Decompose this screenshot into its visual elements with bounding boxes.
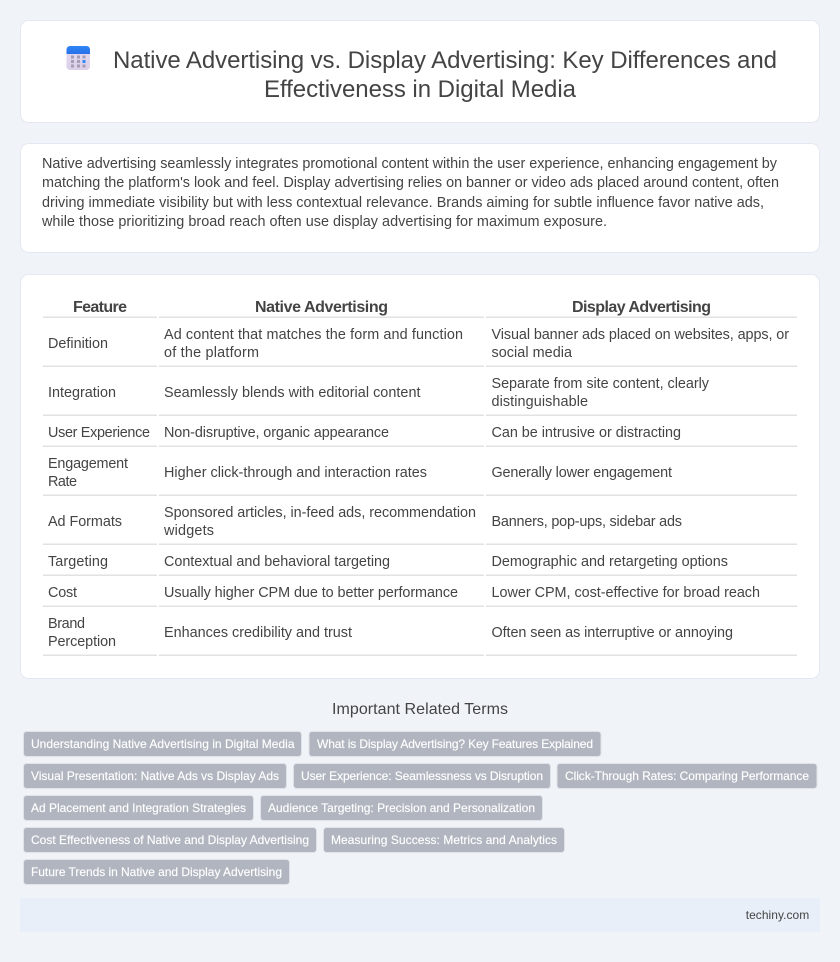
tag: Understanding Native Advertising in Digital Media (31, 737, 295, 751)
heading: important related terms: Important Related Terms (332, 701, 508, 718)
tag (309, 732, 601, 756)
tag (24, 732, 302, 756)
row: integration: distinguishable (492, 394, 588, 410)
title: Effectiveness in Digital Media (264, 76, 577, 103)
tag (557, 764, 817, 788)
row: definition: Ad content that matches the form and function (164, 327, 463, 343)
tag (294, 764, 550, 788)
tag: Cost Effectiveness of Native and Display Advertising (31, 833, 309, 847)
row: engagement rate (48, 456, 672, 490)
row: integration (48, 376, 710, 410)
table header row (73, 299, 711, 316)
tag (24, 764, 286, 788)
row: engagement rate: Higher click-through and interaction rates (164, 465, 427, 481)
row: user experience: Non-disruptive, organic appearance (164, 425, 389, 441)
row: brand perception (48, 616, 733, 650)
tag: Visual Presentation: Native Ads vs Display Ads (31, 769, 279, 783)
row: targeting (48, 554, 728, 570)
footer bar: techiny.com (746, 908, 809, 922)
row: brand perception: Enhances credibility and trust (164, 625, 352, 641)
tag: What is Display Advertising? Key Features Explained (317, 737, 593, 751)
table header row: Display Advertising (572, 299, 711, 316)
text block: introduction paragraph: driving immediate visibility but with less contextual relevance. Brands aiming for subtle influence favor native ads, (42, 195, 764, 211)
tag: Measuring Success: Metrics and Analytics (331, 833, 557, 847)
title (113, 47, 777, 103)
row: integration: Separate from site content, clearly (492, 376, 710, 392)
tag: Audience Targeting: Precision and Personalization (268, 801, 535, 815)
tag: Click-Through Rates: Comparing Performance (565, 769, 809, 783)
row: definition: social media (492, 345, 572, 361)
row: user experience: Can be intrusive or distracting (492, 425, 681, 441)
icon: calendar (66, 46, 90, 70)
row: definition: of the platform (164, 345, 259, 361)
row: cost (48, 585, 760, 601)
row: targeting: Demographic and retargeting options (492, 554, 728, 570)
tag list: related terms (24, 732, 817, 884)
row: brand perception: Brand (48, 616, 85, 632)
row: integration: Integration (48, 385, 116, 401)
tag: Future Trends in Native and Display Advertising (31, 865, 282, 879)
tag (24, 796, 254, 820)
row: targeting: Contextual and behavioral targeting (164, 554, 390, 570)
footer bar (20, 898, 820, 932)
row: definition: Definition (48, 336, 108, 352)
tag (260, 796, 542, 820)
row: ad formats: Ad Formats (48, 514, 122, 530)
row: cost: Cost (48, 585, 77, 601)
tag: User Experience: Seamlessness vs Disruption (301, 769, 543, 783)
tag (24, 828, 316, 852)
row: user experience: User Experience (48, 425, 150, 441)
panel: comparison table (20, 274, 820, 678)
row: user experience (48, 425, 681, 441)
row: ad formats (48, 505, 682, 539)
row: engagement rate: Engagement (48, 456, 128, 472)
row: brand perception: Perception (48, 634, 116, 650)
panel: introduction (20, 144, 820, 252)
row: integration: Seamlessly blends with editorial content (164, 385, 420, 401)
row: cost: Usually higher CPM due to better performance (164, 585, 458, 601)
row: definition (48, 327, 789, 361)
row: brand perception: Often seen as interruptive or annoying (492, 625, 733, 641)
panel: header (20, 20, 820, 122)
table header row: Feature (73, 299, 127, 316)
title: Native Advertising vs. Display Advertising: Key Differences and (113, 47, 777, 74)
row: ad formats: widgets (163, 523, 214, 539)
row: definition: Visual banner ads placed on websites, apps, or (492, 327, 789, 343)
row: engagement rate: Generally lower engagement (492, 465, 672, 481)
row: engagement rate: Rate (48, 474, 77, 490)
text block: introduction paragraph: while those prioritizing broad reach often use display advertising for maximum exposure. (41, 214, 607, 230)
text block: introduction paragraph (41, 156, 779, 230)
tag (24, 860, 290, 884)
table header row: Native Advertising (255, 299, 388, 316)
text block: introduction paragraph: matching the platform's look and feel. Display advertising relies on banner or video ads placed around content, often (42, 175, 779, 191)
row: targeting: Targeting (48, 554, 108, 570)
row: cost: Lower CPM, cost-effective for broad reach (492, 585, 760, 601)
row: ad formats: Banners, pop-ups, sidebar ads (492, 514, 682, 530)
text block: introduction paragraph: Native advertising seamlessly integrates promotional content within the user experience, enhancing engagement by (42, 156, 778, 172)
tag (324, 828, 564, 852)
row: ad formats: Sponsored articles, in-feed ads, recommendation (164, 505, 476, 521)
tag: Ad Placement and Integration Strategies (31, 801, 246, 815)
